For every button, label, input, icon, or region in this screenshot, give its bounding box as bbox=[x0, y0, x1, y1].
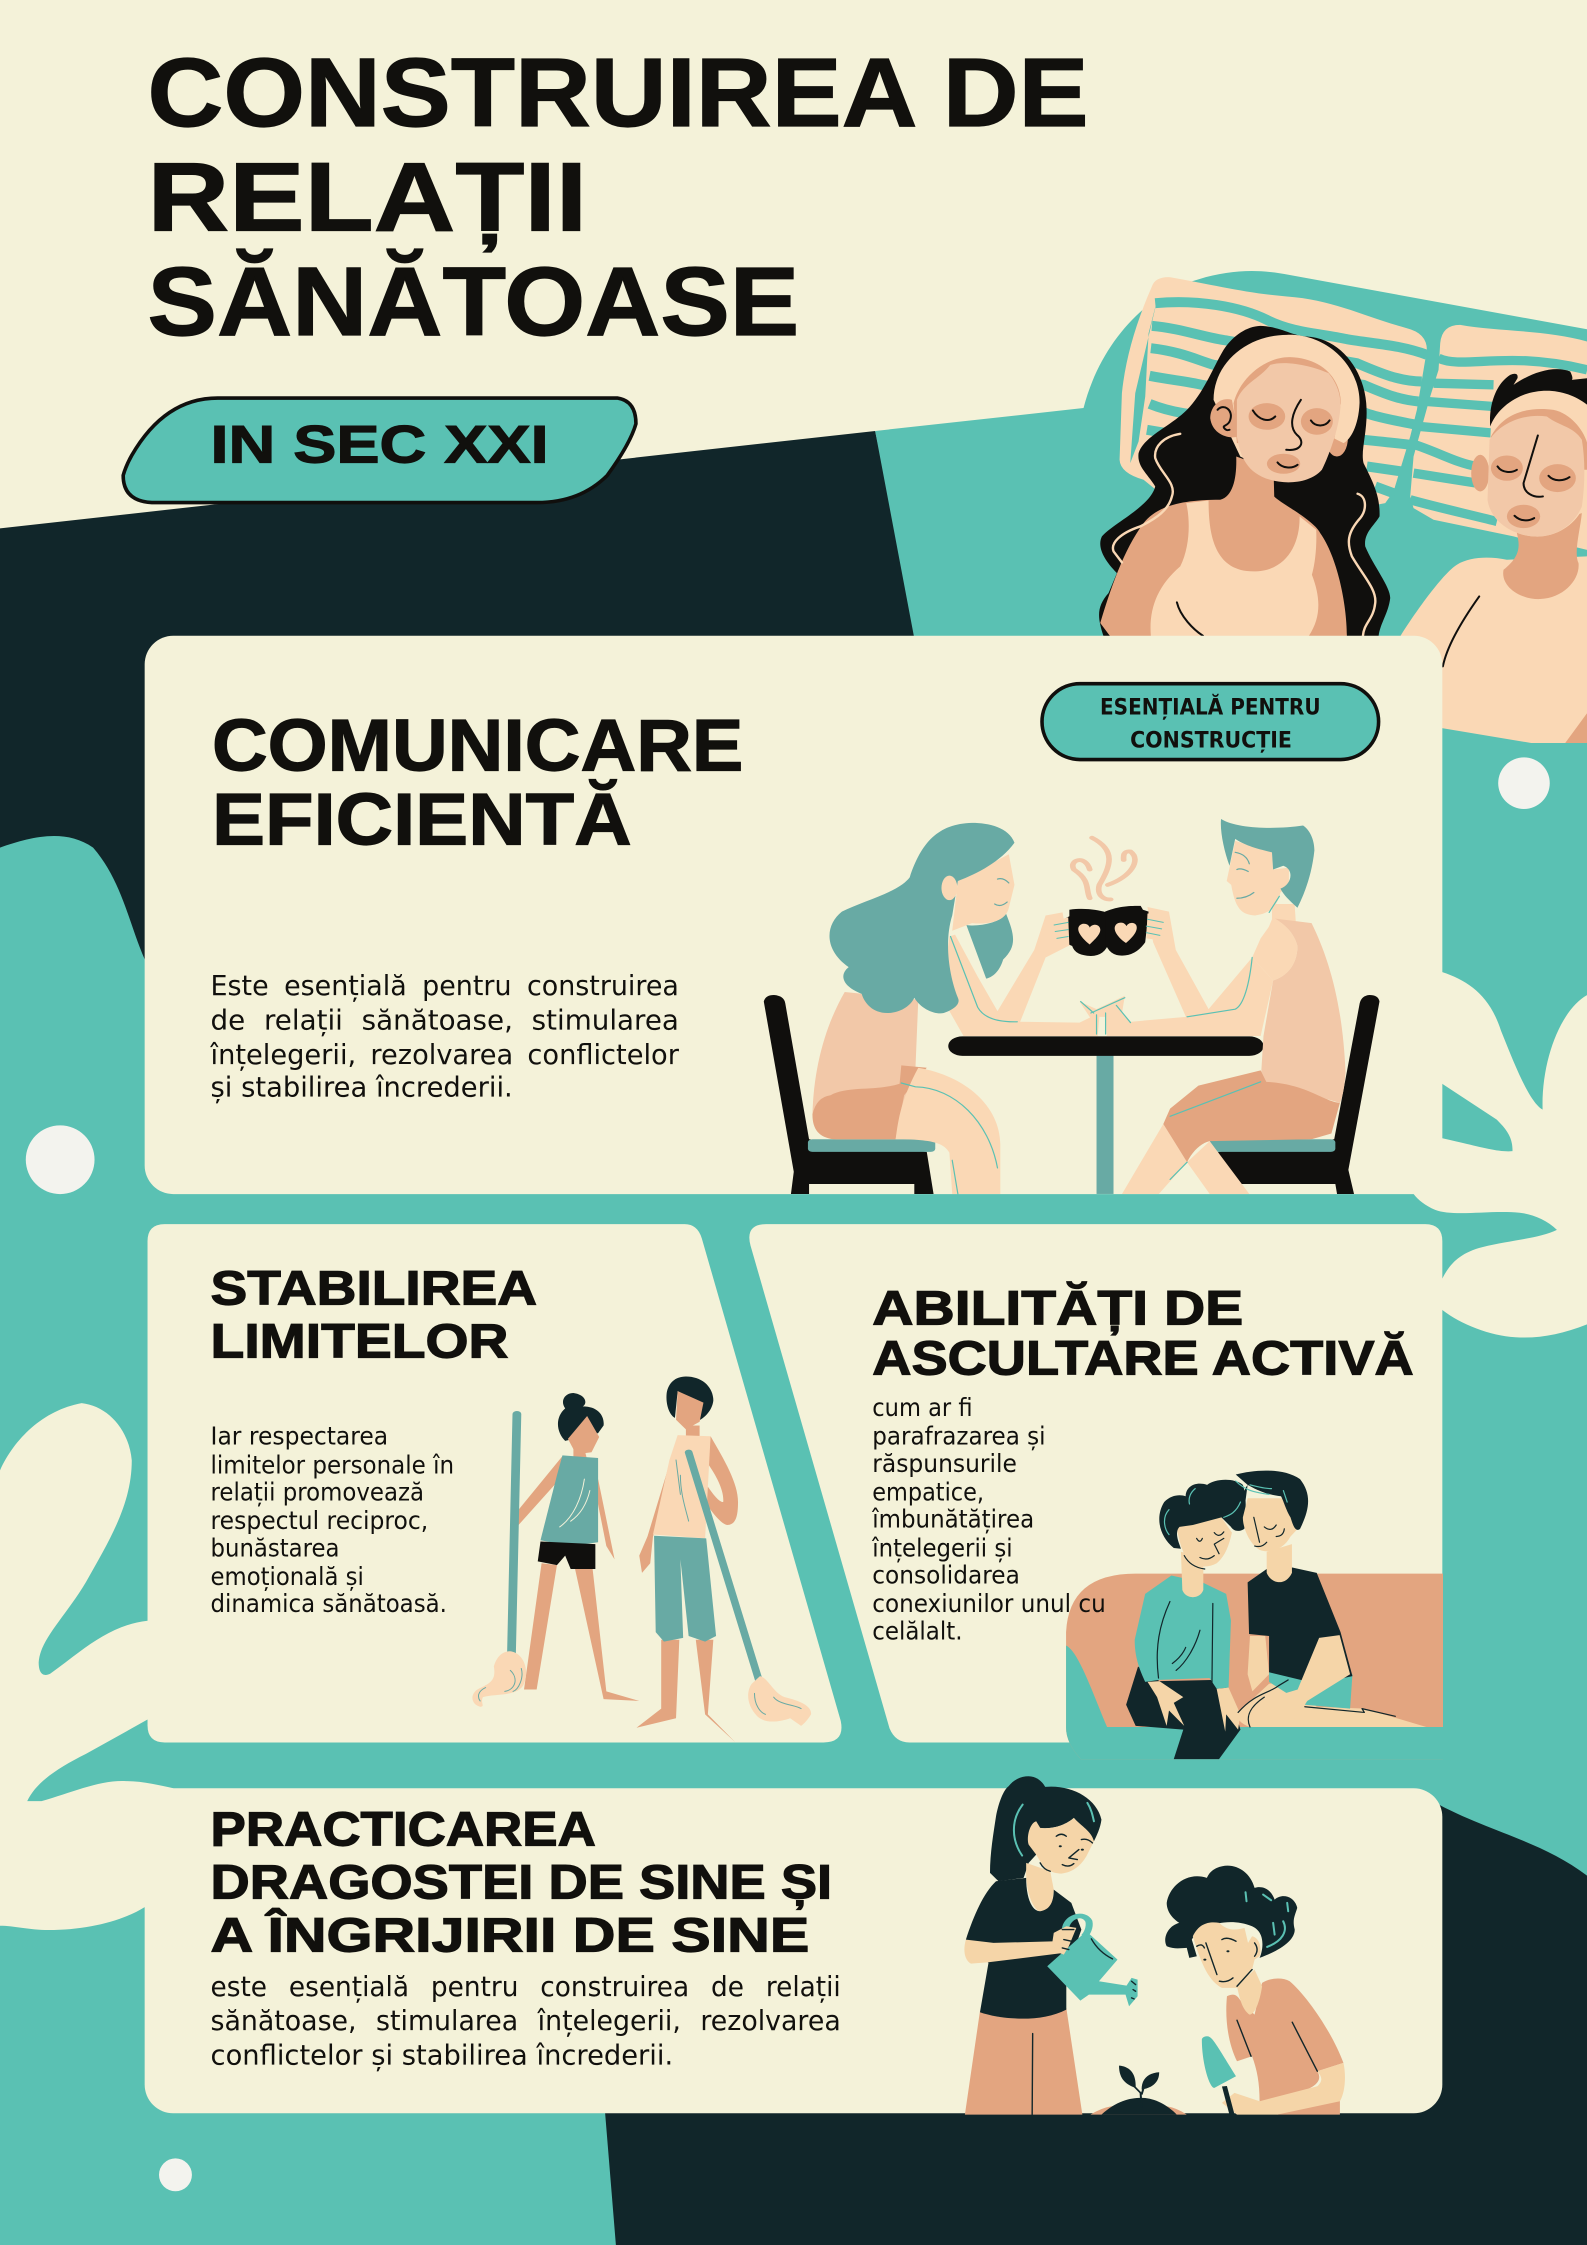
panel: abilitati de ascultare activa bbox=[749, 1224, 1443, 1759]
heading: stabilirea limitelor bbox=[211, 1262, 537, 1368]
text block: limite: bunăstarea bbox=[211, 1533, 339, 1562]
title: SĂNĂTOASE bbox=[148, 247, 799, 356]
text block: ascultare: conexiunilor unul cu bbox=[872, 1589, 1106, 1618]
text block: dragoste de sine: conflictelor și stabilirea încrederii. bbox=[211, 2039, 673, 2072]
mugs bbox=[1054, 906, 1164, 956]
heading: practicarea dragostei de sine bbox=[211, 1804, 832, 1962]
panel: comunicare eficienta bbox=[145, 636, 1443, 2115]
text block: comunicare bbox=[210, 969, 679, 1104]
person with mop bbox=[637, 1377, 811, 1742]
callout pill: esentiala pentru constructie: ESENȚIALĂ PENTRU bbox=[1100, 692, 1321, 720]
illustration: couple on couch bbox=[1066, 1471, 1443, 1759]
panel: practicarea dragostei de sine bbox=[145, 1776, 1442, 2115]
heading: stabilirea limitelor: LIMITELOR bbox=[211, 1315, 508, 1368]
text block: comunicare: și stabilirea încrederii. bbox=[211, 1071, 513, 1104]
text block: limite: Iar respectarea bbox=[211, 1422, 388, 1451]
text block: comunicare: Este esențială pentru construirea bbox=[211, 969, 679, 1002]
heading: practicarea dragostei de sine: DRAGOSTEI DE SINE ȘI bbox=[211, 1857, 832, 1910]
decorative circle right bbox=[1498, 757, 1550, 809]
person left bbox=[1126, 1480, 1246, 1759]
illustration: two people with mops bbox=[472, 1377, 811, 1742]
text block: comunicare: înțelegerii, rezolvarea conflictelor bbox=[210, 1038, 679, 1071]
title: CONSTRUIREA DE bbox=[148, 38, 1089, 147]
title bbox=[148, 38, 1089, 356]
heading: abilitati de ascultare activa: ASCULTARE ACTIVĂ bbox=[872, 1331, 1414, 1385]
text block: dragoste de sine: este esențială pentru construirea de relații bbox=[211, 1970, 841, 2003]
panel: stabilirea limitelor bbox=[148, 1224, 841, 1742]
callout pill: esentiala pentru constructie: CONSTRUCȚIE bbox=[1130, 727, 1292, 753]
heading: comunicare eficienta: COMUNICARE bbox=[212, 705, 743, 786]
heading: abilitati de ascultare activa bbox=[872, 1281, 1414, 1385]
callout pill: esentiala pentru constructie bbox=[1042, 684, 1379, 760]
decorative circle bottom bbox=[159, 2158, 192, 2191]
badge: in sec XXI: IN SEC XXI bbox=[211, 415, 549, 474]
text block: limite: emoțională și bbox=[211, 1562, 364, 1591]
woman with watering can bbox=[964, 1776, 1138, 2115]
text block: dragoste de sine: sănătoase, stimularea înțelegerii, rezolvarea bbox=[211, 2004, 841, 2037]
text block: ascultare: cum ar fi bbox=[872, 1393, 973, 1422]
illustration: couple lying on pillows bbox=[1099, 277, 1587, 743]
illustration: woman watering plant with man bbox=[964, 1776, 1345, 2115]
steam bbox=[1073, 838, 1135, 899]
heading: abilitati de ascultare activa: ABILITĂȚI DE bbox=[872, 1281, 1243, 1335]
text block: ascultare: îmbunătățirea bbox=[871, 1505, 1034, 1534]
couch bbox=[1066, 1574, 1443, 1759]
woman bbox=[812, 823, 1099, 1194]
heading: comunicare eficienta bbox=[212, 705, 743, 861]
heading: practicarea dragostei de sine: PRACTICAREA bbox=[211, 1804, 596, 1857]
chairs bbox=[764, 995, 1379, 1194]
background: dark bottom right shape bbox=[604, 1801, 1587, 2245]
text block: dragoste de sine bbox=[211, 1970, 841, 2072]
background: dark diagonal shape bbox=[0, 431, 924, 1031]
decorative circle left bbox=[26, 1125, 95, 1194]
plant mound with sprout bbox=[1090, 2066, 1187, 2115]
pillow left bbox=[1120, 277, 1427, 536]
pillow right bbox=[1410, 325, 1587, 556]
heading: practicarea dragostei de sine: A ÎNGRIJIRII DE SINE bbox=[211, 1907, 809, 1962]
joined hands bbox=[1080, 996, 1132, 1036]
table bbox=[948, 1036, 1263, 1194]
text block: limite: dinamica sănătoasă. bbox=[211, 1589, 447, 1618]
heading: comunicare eficienta: EFICIENTĂ bbox=[212, 780, 632, 861]
text block: limite: limitelor personale în bbox=[211, 1450, 454, 1479]
heading: stabilirea limitelor: STABILIREA bbox=[211, 1262, 537, 1315]
background: cream leaf right bbox=[1414, 972, 1587, 1338]
man with trowel bbox=[1165, 1866, 1345, 2115]
text block: ascultare: celălalt. bbox=[872, 1616, 963, 1645]
man bbox=[1400, 369, 1587, 743]
text block: ascultare: înțelegerii și bbox=[871, 1533, 1013, 1562]
text block: ascultare: răspunsurile bbox=[872, 1449, 1017, 1478]
text block: limite bbox=[211, 1422, 454, 1618]
woman bbox=[1099, 326, 1390, 636]
illustration: couple at table with mugs bbox=[764, 819, 1379, 1194]
text block: comunicare: de relații sănătoase, stimularea bbox=[211, 1003, 679, 1036]
man bbox=[1108, 819, 1346, 1194]
title: RELAȚII bbox=[148, 143, 587, 253]
text block: limite: respectul reciproc, bbox=[211, 1506, 428, 1535]
person right bbox=[1236, 1471, 1426, 1727]
text block: limite: relații promovează bbox=[211, 1477, 424, 1506]
woman with mop bbox=[472, 1393, 639, 1707]
badge: in sec XXI bbox=[123, 398, 636, 503]
background: cream leaf left bbox=[0, 1403, 173, 1930]
text block: ascultare: parafrazarea și bbox=[872, 1422, 1046, 1451]
text block: ascultare: empatice, bbox=[872, 1477, 984, 1506]
text block: ascultare: consolidarea bbox=[872, 1561, 1020, 1590]
text block: ascultare bbox=[871, 1393, 1106, 1645]
